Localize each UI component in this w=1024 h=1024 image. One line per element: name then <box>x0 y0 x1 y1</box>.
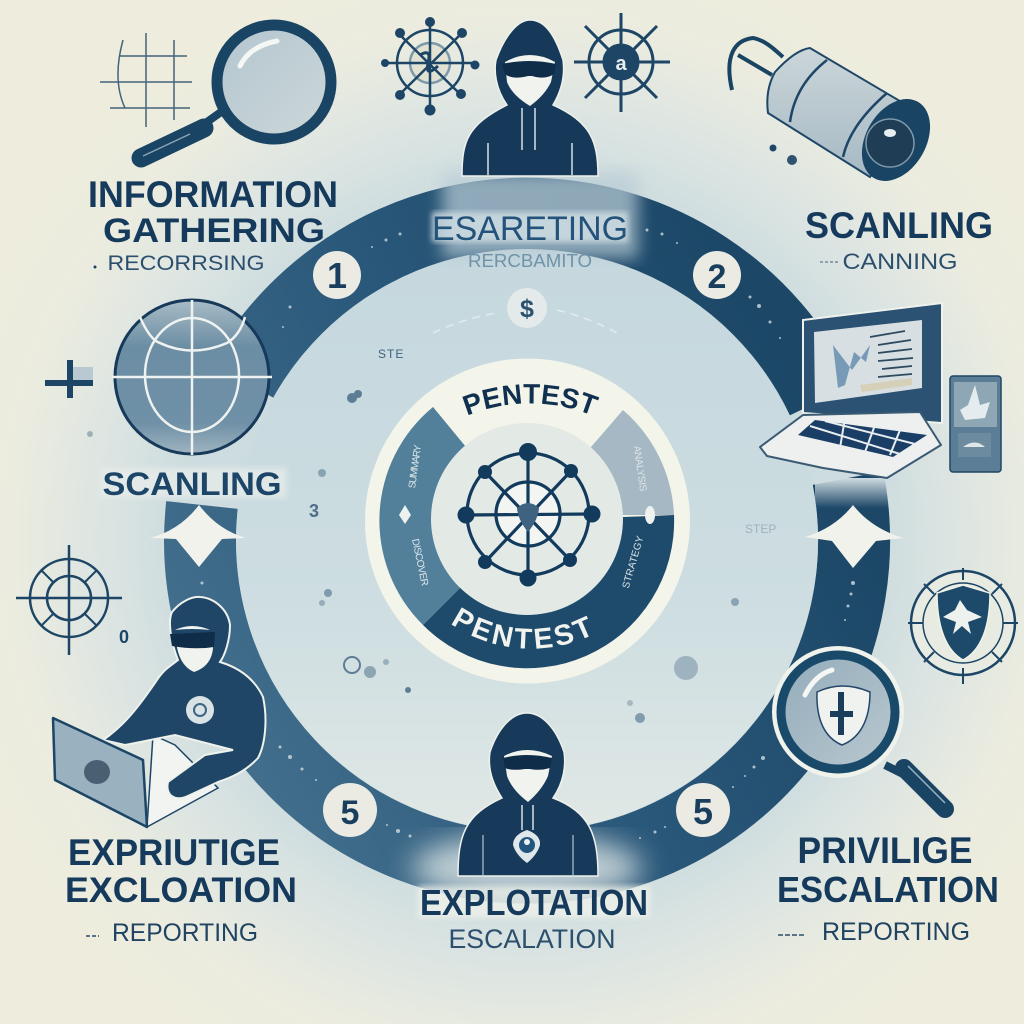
center title bottom: PENTEST <box>452 607 589 649</box>
heading: scanning right <box>805 205 993 274</box>
inner disc step marks: STE <box>378 347 404 361</box>
process ring <box>200 172 897 902</box>
heading: exploitation left: EXPRIUTIGE <box>68 832 280 873</box>
inner disc step marks <box>309 347 776 723</box>
heading: privilege right: PRIVILIGE <box>798 830 972 871</box>
ring dots <box>200 228 855 839</box>
heading: exploitation bottom: ESCALATION <box>448 924 616 954</box>
icon: crosshair left: 0 <box>119 627 129 647</box>
segment small labels <box>407 444 648 590</box>
left arrow marker <box>150 505 246 567</box>
inner disc step marks: STEP <box>745 522 776 536</box>
heading: information gathering <box>88 174 338 275</box>
icon: hacker bottom <box>458 713 598 876</box>
step 1 badge <box>313 251 361 299</box>
heading: privilege right: ESCALATION <box>777 869 999 910</box>
icon: magnifier bottom right <box>772 646 945 809</box>
center badge <box>365 358 690 684</box>
heading: exploitation left: REPORTING <box>112 919 258 947</box>
segment: bottom <box>423 515 674 668</box>
icon: hacker top <box>462 20 598 176</box>
icon: shield right <box>908 568 1018 684</box>
step 1 badge: 1 <box>327 255 347 296</box>
segment: right <box>527 410 674 521</box>
step 4 badge <box>323 783 377 837</box>
segment small labels: STRATEGY <box>621 535 646 590</box>
inner disc step marks: 3 <box>309 501 319 521</box>
center title top: PENTEST <box>462 384 600 415</box>
heading: exploitation bottom <box>418 882 650 954</box>
heading: exploitation left <box>65 832 297 947</box>
sub-label: RERCBAMITO <box>468 251 592 271</box>
heading: exploitation bottom: EXPLOTATION <box>420 882 648 923</box>
dollar badge: $ <box>520 295 534 323</box>
segment small labels: ANALYSIS <box>631 445 648 493</box>
step 2 badge <box>693 251 741 299</box>
step 5 badge: 5 <box>693 791 713 832</box>
heading: privilege right <box>777 830 999 946</box>
heading: exploitation left: EXCLOATION <box>65 871 297 910</box>
heading: information gathering: RECORRSING <box>108 252 264 275</box>
heading: esareting: ESARETING <box>432 210 628 248</box>
inner disc <box>431 423 623 615</box>
heading: esareting <box>432 210 628 271</box>
step 2 badge: 2 <box>708 258 726 296</box>
icon: crosshair left <box>16 545 129 655</box>
dashed guide near badge <box>433 310 617 333</box>
heading: privilege right: REPORTING <box>822 918 970 946</box>
icon: globe left <box>112 300 272 455</box>
dollar badge <box>507 288 547 328</box>
right arrow marker <box>805 505 903 568</box>
center network icon <box>458 443 600 586</box>
step 5 badge <box>676 783 730 837</box>
segment small labels: SUMMARY <box>407 444 424 489</box>
segment small labels: DISCOVER <box>409 538 430 587</box>
icon: hacker with laptop <box>53 597 265 827</box>
segment markers <box>399 505 411 524</box>
icon: network left of hacker <box>381 17 480 116</box>
icon: magnifying glass top left <box>100 25 331 158</box>
heading: information gathering: INFORMATION <box>88 174 338 215</box>
step 4 badge: 5 <box>341 794 359 832</box>
icon: network right of hacker: a <box>615 53 627 75</box>
segment: left <box>379 407 527 625</box>
heading: scanning left: SCANLING <box>102 466 282 502</box>
icon: plus marker <box>45 360 93 437</box>
heading: scanning right: CANNING <box>842 249 958 274</box>
icon: network right of hacker <box>574 13 670 112</box>
icon: laptop right <box>760 303 1001 478</box>
heading: scanning right: SCANLING <box>805 205 993 246</box>
icon: camera top right <box>729 38 944 193</box>
heading: information gathering: GATHERING <box>103 212 325 250</box>
